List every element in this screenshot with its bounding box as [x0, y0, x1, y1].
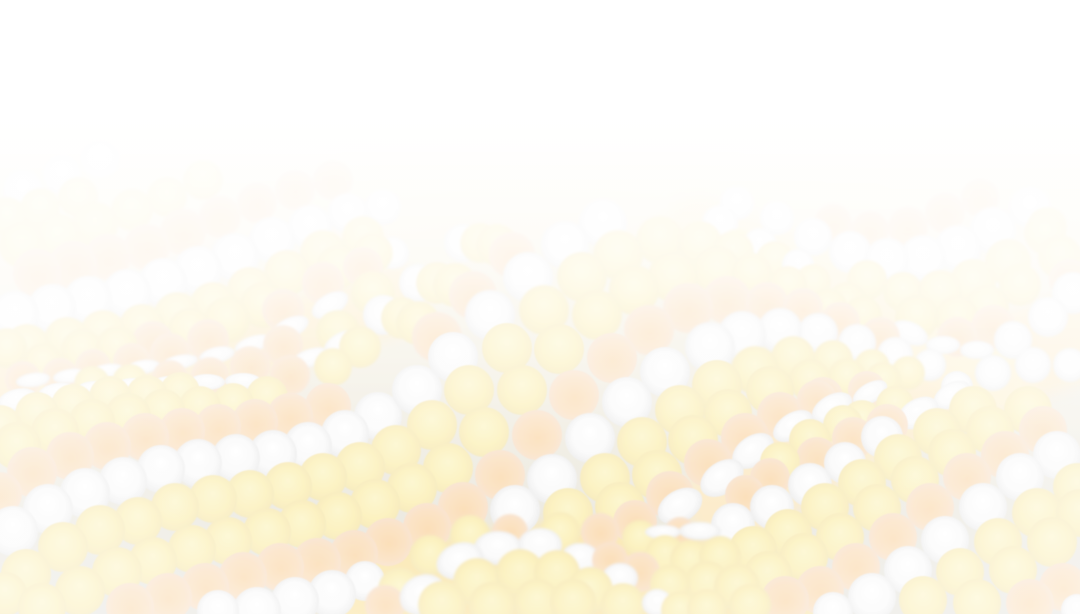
mid spheres [0, 239, 1080, 402]
far spheres [0, 141, 1080, 282]
soft colour filler behind compressed sphere rows [0, 230, 1080, 600]
central spheres [0, 323, 1080, 614]
foreground blurred spheres [365, 512, 771, 614]
